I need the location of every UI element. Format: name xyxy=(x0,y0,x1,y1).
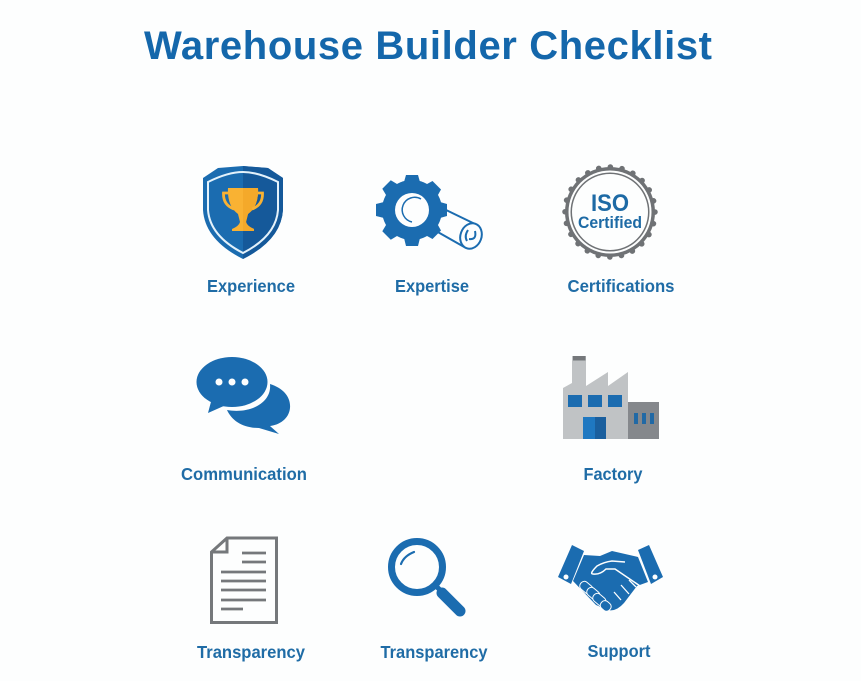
label: Transparency (magnifier): Transparency xyxy=(380,642,488,662)
icon: speech bubbles xyxy=(196,357,290,434)
icon: ISO certified badge: ISO xyxy=(591,190,629,217)
icon: shield with trophy xyxy=(203,166,283,259)
icon: handshake xyxy=(558,545,663,613)
label: Expertise: Expertise xyxy=(395,276,469,296)
icon: ISO certified badge xyxy=(565,167,655,257)
label: Certifications: Certifications xyxy=(568,276,675,296)
label: Factory: Factory xyxy=(584,464,643,484)
label: Transparency (document): Transparency xyxy=(197,642,305,662)
label: Communication: Communication xyxy=(181,464,307,484)
icon: gear with pipe xyxy=(376,175,485,252)
label: Support: Support xyxy=(588,641,651,661)
icon: ISO certified badge: Certified xyxy=(578,213,642,232)
title: Warehouse Builder Checklist xyxy=(144,24,712,68)
pipe xyxy=(436,209,485,252)
label: Experience: Experience xyxy=(207,276,295,296)
icon: factory xyxy=(563,356,659,439)
gear xyxy=(376,175,447,246)
icon: document xyxy=(212,538,276,622)
icon: magnifying glass xyxy=(392,542,460,611)
